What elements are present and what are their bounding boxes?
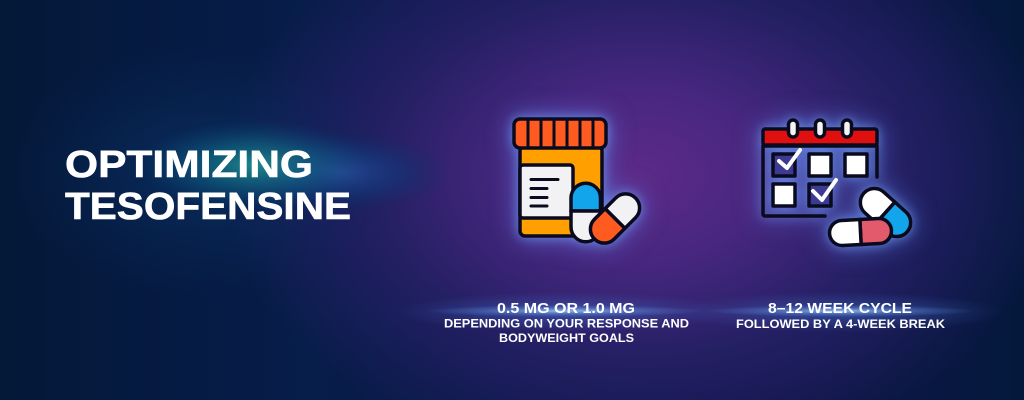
capsule: white and red xyxy=(829,218,892,246)
glow line: right caption xyxy=(675,292,1005,332)
calendar header xyxy=(763,129,877,145)
capsule: blue and white xyxy=(571,183,600,242)
capsule: white and blue xyxy=(855,183,916,242)
calendar day cells xyxy=(773,154,867,206)
bottle label xyxy=(520,165,573,218)
caption: cycle xyxy=(736,301,945,331)
bottle lid xyxy=(514,119,606,148)
caption: dose xyxy=(444,301,689,345)
caption: dose: 0.5 MG OR 1.0 MG xyxy=(497,301,635,317)
title xyxy=(65,144,351,228)
caption: cycle: 8–12 WEEK CYCLE xyxy=(768,301,912,317)
calendar frame xyxy=(763,146,877,216)
check marks xyxy=(779,150,836,200)
capsule: orange and white xyxy=(585,188,645,249)
bottle body xyxy=(520,146,602,236)
title: TESOFENSINE xyxy=(65,186,351,228)
calendar rings xyxy=(788,120,852,137)
caption: dose: BODYWEIGHT GOALS xyxy=(499,331,634,345)
caption: cycle: FOLLOWED BY A 4-WEEK BREAK xyxy=(736,317,945,331)
icon: pill bottle with capsules xyxy=(514,119,645,249)
icon: calendar with capsules xyxy=(763,120,916,246)
glow line: left caption xyxy=(395,292,735,332)
caption: dose: DEPENDING ON YOUR RESPONSE AND xyxy=(444,316,689,330)
title: OPTIMIZING xyxy=(65,144,313,186)
